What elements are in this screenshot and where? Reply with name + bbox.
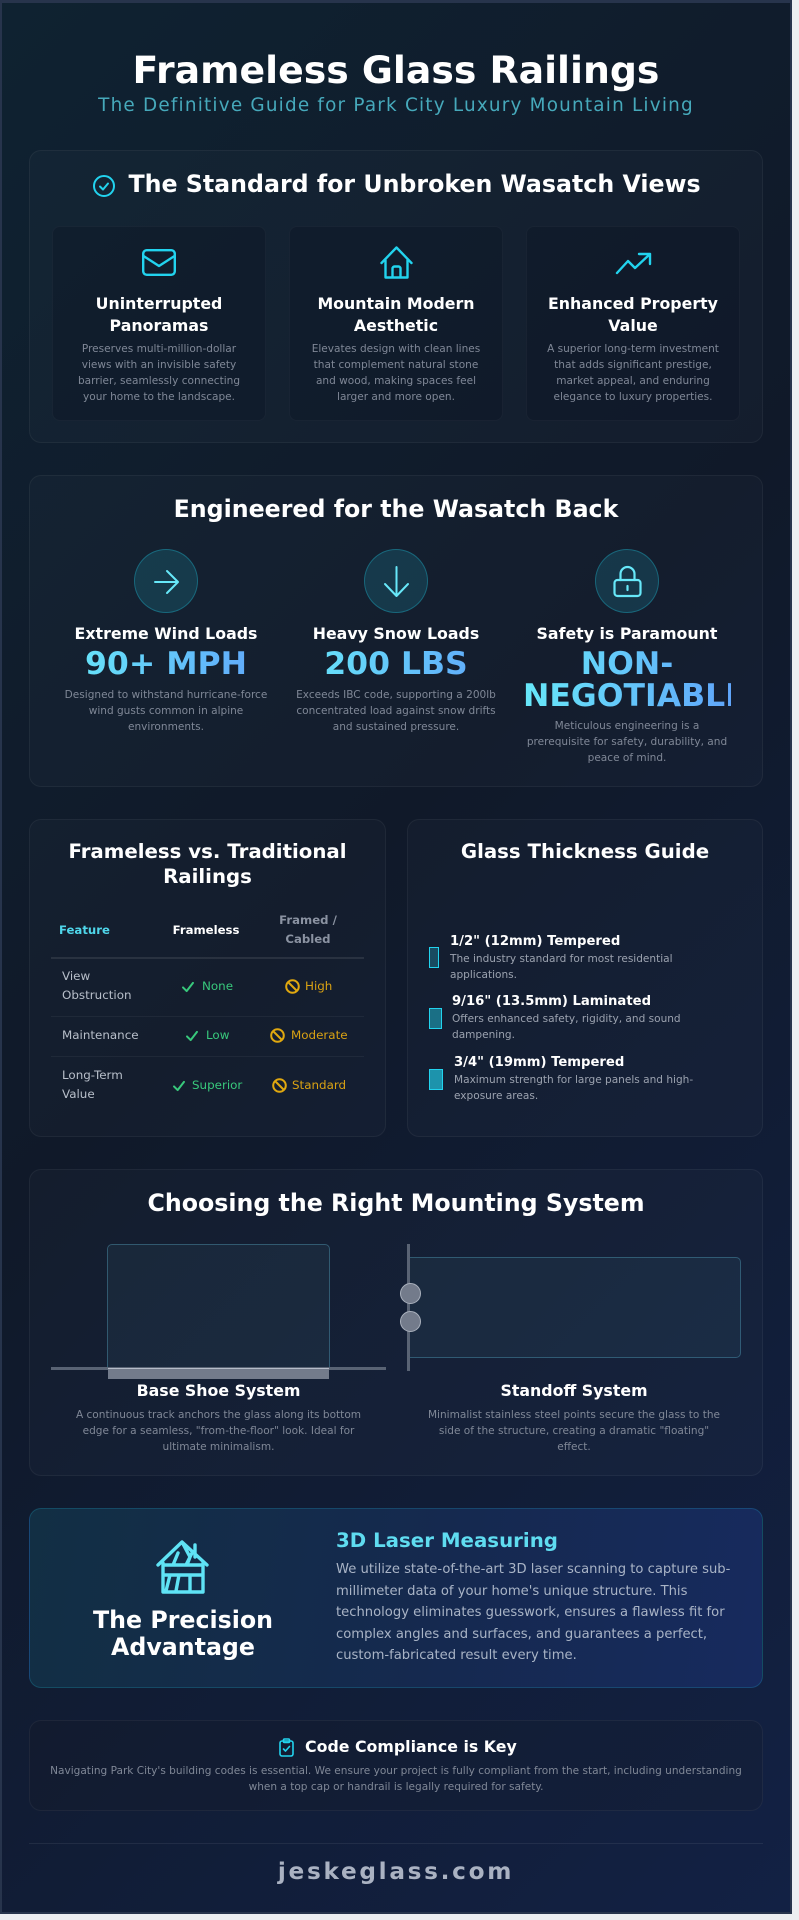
card text: panoramas: barrier, seamlessly connecting xyxy=(78,375,240,387)
stat text: snow: concentrated load against snow drifts xyxy=(296,705,496,717)
standoff pin bottom xyxy=(400,1311,421,1332)
text: standoff: effect. xyxy=(557,1441,591,1453)
header: feature: Feature xyxy=(59,923,110,937)
row label: maintenance: Maintenance xyxy=(62,1028,139,1042)
panel: precision advantage xyxy=(29,1508,763,1688)
stat text: safety: Meticulous engineering is a xyxy=(555,720,699,732)
icon: snow circle xyxy=(364,549,428,613)
footer rule xyxy=(29,1843,763,1844)
card text: aesthetic: Elevates design with clean lines xyxy=(312,343,480,355)
glass text: 12mm: applications. xyxy=(450,969,517,981)
text: 3d laser: complex angles and surfaces, and guarantees a perfect, xyxy=(336,1626,707,1642)
heading: precision advantage: Advantage xyxy=(111,1633,255,1661)
glass text: 13.5mm: Offers enhanced safety, rigidity, and sound xyxy=(452,1013,681,1025)
stat text: snow: Exceeds IBC code, supporting a 200lb xyxy=(296,689,496,701)
row label: view obstruction: Obstruction xyxy=(62,988,132,1002)
row rule xyxy=(51,1016,364,1017)
diagram: base shoe xyxy=(51,1244,386,1379)
heading: unbroken views: The Standard for Unbroken Wasatch Views xyxy=(128,170,701,198)
glass text: 19mm: Maximum strength for large panels and high- xyxy=(454,1074,693,1086)
icon: ban standard xyxy=(272,1078,287,1093)
card title: value xyxy=(548,294,718,334)
heading: engineered: Engineered for the Wasatch Back xyxy=(174,495,618,523)
glass bar: 12mm xyxy=(429,947,439,968)
panel: thickness xyxy=(407,819,763,1137)
icon: check low xyxy=(186,1030,198,1042)
row label: long-term value xyxy=(62,1068,123,1101)
row label: long-term value: Value xyxy=(62,1087,95,1101)
card title: panoramas: Uninterrupted xyxy=(96,294,222,313)
icon: ban high xyxy=(285,979,300,994)
glass bar: 13.5mm xyxy=(429,1008,442,1029)
heading: comparison: Frameless vs. Traditional xyxy=(68,840,347,863)
card title: value: Value xyxy=(608,316,658,334)
panel: unbroken views xyxy=(29,150,763,443)
value: none: None xyxy=(202,979,233,993)
stat text: safety: peace of mind. xyxy=(588,752,666,764)
stat text: snow xyxy=(296,689,496,733)
floor line xyxy=(51,1367,386,1370)
card text: value: A superior long-term investment xyxy=(547,343,719,355)
panel: engineered xyxy=(29,475,763,787)
card text: panoramas: Preserves multi-million-dollar xyxy=(82,343,236,355)
glass text: 13.5mm: dampening. xyxy=(452,1029,515,1041)
title: base shoe: Base Shoe System xyxy=(137,1381,300,1400)
glass text: 19mm: exposure areas. xyxy=(454,1090,538,1102)
header: framed: Framed / xyxy=(279,913,337,927)
icon: scanned house xyxy=(156,1540,209,1594)
heading: comparison xyxy=(68,840,347,888)
text: base shoe: A continuous track anchors the glass along its bottom xyxy=(76,1409,361,1421)
panel: mounting xyxy=(29,1169,763,1476)
card text: value xyxy=(547,343,719,403)
heading: thickness: Glass Thickness Guide xyxy=(461,840,709,863)
footer: website: jeskeglass.com xyxy=(278,1858,514,1885)
header: framed xyxy=(279,913,337,946)
row rule xyxy=(51,1056,364,1057)
text: base shoe xyxy=(76,1409,361,1453)
icon: wind circle xyxy=(134,549,198,613)
card text: panoramas: views with an invisible safety xyxy=(82,359,236,371)
text: standoff: Minimalist stainless steel points secure the glass to the xyxy=(428,1409,720,1421)
stat text: wind: wind gusts common in alpine xyxy=(89,705,243,717)
text: 3d laser: custom-fabricated result every time. xyxy=(336,1648,577,1663)
title: Frameless Glass Railings xyxy=(133,48,659,92)
text: base shoe: ultimate minimalism. xyxy=(163,1441,274,1453)
card text: aesthetic: that complement natural stone xyxy=(314,359,478,371)
card title: panoramas xyxy=(96,294,222,334)
card: panoramas xyxy=(52,226,266,421)
value: standard: Standard xyxy=(292,1078,346,1092)
glass text: 12mm xyxy=(450,953,673,981)
card text: panoramas: your home to the landscape. xyxy=(83,391,235,403)
heading: precision advantage xyxy=(93,1606,273,1661)
glass text: 19mm xyxy=(454,1074,693,1102)
text: base shoe: edge for a seamless, "from-the-floor" look. Ideal for xyxy=(83,1425,354,1437)
stat title: snow: Heavy Snow Loads xyxy=(313,624,479,643)
card title: aesthetic xyxy=(317,294,475,334)
diagram: standoff xyxy=(400,1244,741,1371)
stat value: safety xyxy=(523,649,731,712)
card text: value: market appeal, and enduring xyxy=(556,375,710,387)
icon: check circle xyxy=(93,175,115,197)
card text: aesthetic: larger and more open. xyxy=(337,391,455,403)
icon: envelope xyxy=(142,249,176,276)
title: standoff: Standoff System xyxy=(500,1381,648,1400)
header: framed: Cabled xyxy=(285,932,331,946)
card text: aesthetic xyxy=(312,343,480,403)
panel: code compliance xyxy=(29,1720,763,1811)
row label: view obstruction xyxy=(62,969,132,1002)
wall line xyxy=(407,1244,410,1371)
heading: code compliance: Code Compliance is Key xyxy=(305,1737,517,1756)
icon: clipboard xyxy=(279,1738,294,1757)
glass title: 13.5mm: 9/16" (13.5mm) Laminated xyxy=(452,994,651,1009)
icon: trending up xyxy=(616,252,652,274)
stat text: wind: environments. xyxy=(128,721,204,733)
glass text: 13.5mm xyxy=(452,1013,681,1041)
text: 3d laser xyxy=(336,1562,730,1663)
card: aesthetic xyxy=(289,226,503,421)
icon: lock circle xyxy=(595,549,659,613)
card: value xyxy=(526,226,740,421)
card title: aesthetic: Aesthetic xyxy=(354,316,438,334)
row label: long-term value: Long-Term xyxy=(62,1068,123,1082)
card title: panoramas: Panoramas xyxy=(110,316,208,334)
text: code compliance: Navigating Park City's building codes is essential. We ensure your project is fully compliant from the start, including understanding xyxy=(50,1765,742,1777)
heading: mounting: Choosing the Right Mounting System xyxy=(147,1189,645,1217)
glass text: 12mm: The industry standard for most residential xyxy=(450,953,673,965)
stat value: snow xyxy=(292,649,500,680)
stat text: wind: Designed to withstand hurricane-force xyxy=(65,689,267,701)
value: superior: Superior xyxy=(192,1078,242,1092)
heading: 3d laser: 3D Laser Measuring xyxy=(336,1529,558,1552)
text: code compliance: when a top cap or handrail is legally required for safety. xyxy=(249,1781,543,1793)
heading: precision advantage: The Precision xyxy=(93,1606,273,1634)
shoe track xyxy=(108,1368,329,1379)
card text: value: that adds significant prestige, xyxy=(554,359,712,371)
heading: comparison: Railings xyxy=(163,864,252,888)
card text: panoramas xyxy=(78,343,240,403)
card title: value: Enhanced Property xyxy=(548,294,718,313)
card text: aesthetic: and wood, making spaces feel xyxy=(316,375,476,387)
text: 3d laser: millimeter data of your home's unique structure. This xyxy=(336,1584,687,1598)
glass panel xyxy=(409,1257,741,1358)
card text: value: elegance to luxury properties. xyxy=(554,391,712,403)
stat text: wind xyxy=(65,689,267,733)
card title: aesthetic: Mountain Modern xyxy=(317,294,475,313)
glass panel xyxy=(107,1244,330,1369)
stat text: safety xyxy=(527,720,727,764)
stat title: safety: Safety is Paramount xyxy=(537,624,717,643)
icon: check none xyxy=(182,982,194,992)
text: 3d laser: We utilize state-of-the-art 3D laser scanning to capture sub- xyxy=(336,1562,730,1577)
text: standoff xyxy=(428,1409,720,1453)
icon: house xyxy=(380,246,413,279)
text: standoff: side of the structure, creating a dramatic "floating" xyxy=(439,1425,709,1437)
text: code compliance xyxy=(50,1765,742,1793)
panel: comparison xyxy=(29,819,386,1137)
row label: view obstruction: View xyxy=(62,969,90,983)
stat title: wind: Extreme Wind Loads xyxy=(75,624,257,643)
stat text: safety: prerequisite for safety, durability, and xyxy=(527,736,727,748)
value: high: High xyxy=(305,979,332,993)
icon: check superior xyxy=(173,1080,185,1092)
value: low: Low xyxy=(206,1028,229,1042)
subtitle: The Definitive Guide for Park City Luxury Mountain Living xyxy=(98,95,694,116)
text: 3d laser: technology eliminates guesswork, ensures a flawless fit for xyxy=(336,1605,725,1620)
icon: ban moderate xyxy=(270,1028,285,1043)
stat text: snow: and sustained pressure. xyxy=(333,721,459,733)
glass bar: 19mm xyxy=(429,1069,443,1090)
standoff pin top xyxy=(400,1283,421,1304)
comparison table xyxy=(51,913,364,1101)
header rule xyxy=(51,957,364,959)
glass title: 12mm: 1/2" (12mm) Tempered xyxy=(450,934,620,949)
value: moderate: Moderate xyxy=(291,1028,348,1042)
header: frameless: Frameless xyxy=(173,923,239,937)
glass title: 19mm: 3/4" (19mm) Tempered xyxy=(454,1055,624,1070)
